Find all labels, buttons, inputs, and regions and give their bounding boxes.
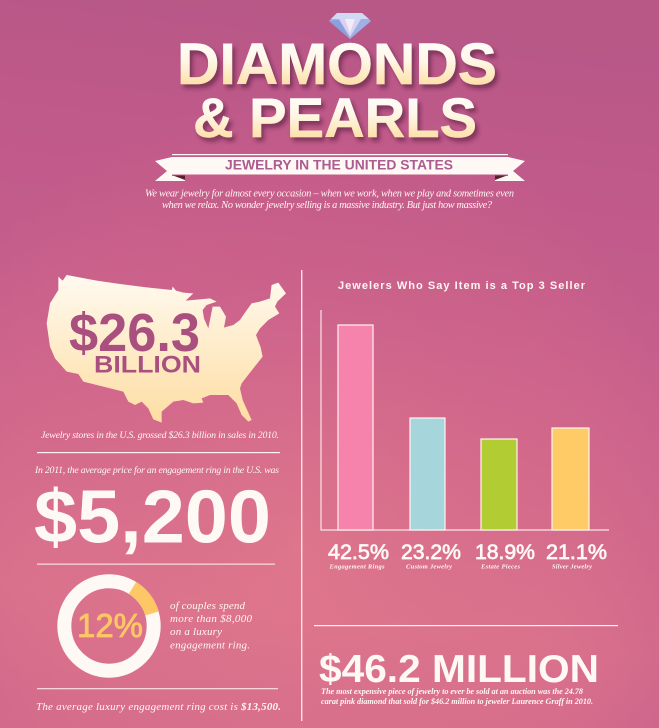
values and labels: Engagement Rings	[328, 564, 385, 570]
bar: Custom Jewelry	[410, 418, 445, 530]
caption: most expensive: The most expensive piece of jewelry to ever be sold at an auction was the 24.78	[321, 687, 583, 696]
text: couples spend: of couples spend	[170, 600, 246, 612]
title: DIAMONDS	[177, 32, 497, 97]
caption: most expensive	[321, 687, 593, 706]
text: couples spend	[170, 600, 252, 652]
banner text: JEWELRY IN THE UNITED STATES	[225, 156, 453, 172]
values and labels: Estate Pieces	[480, 564, 520, 570]
title: & PEARLS	[193, 86, 477, 149]
bar: Estate Pieces	[481, 439, 517, 530]
values and labels: Custom Jewelry	[406, 564, 452, 570]
figure: $26.3	[69, 303, 200, 363]
intro text	[145, 188, 514, 211]
bar chart: top 3 sellers	[321, 280, 609, 530]
text: couples spend: more than $8,000	[170, 613, 252, 625]
text: couples spend: engagement ring.	[170, 640, 250, 652]
values and labels: 21.1%	[546, 541, 607, 564]
chart title: Jewelers Who Say Item is a Top 3 Seller	[338, 280, 586, 292]
figure: $5,200: $5,200	[34, 474, 271, 558]
intro text: when we relax. No wonder jewelry selling is a massive industry. But just how massive?	[162, 200, 493, 211]
bar: Engagement Rings	[338, 325, 373, 530]
values and labels: 42.5%	[328, 541, 389, 564]
donut chart: 12%	[64, 581, 154, 671]
caption: map: Jewelry stores in the U.S. grossed $26.3 billion in sales in 2010.	[41, 430, 279, 441]
bar: Silver Jewelry	[552, 428, 589, 530]
icon: diamond	[329, 13, 371, 39]
title	[177, 32, 497, 149]
figure: $46.2 million: $46.2 MILLION	[319, 648, 599, 691]
banner: subtitle ribbon	[155, 154, 525, 181]
axes	[321, 310, 609, 530]
values and labels	[328, 541, 607, 570]
caption: most expensive: carat pink diamond that sold for $46.2 million to jeweler Laurence Graff in 2010.	[321, 697, 593, 706]
vertical divider	[301, 270, 302, 721]
figure unit: BILLION	[94, 352, 201, 378]
text: average luxury ring cost: The average luxury engagement ring cost is $13,500.	[36, 701, 281, 713]
values and labels: 23.2%	[401, 541, 461, 564]
map: United States sales	[47, 275, 286, 423]
intro text: We wear jewelry for almost every occasion – when we work, when we play and sometimes even	[145, 188, 514, 200]
map shape	[47, 275, 286, 423]
values and labels: 18.9%	[475, 541, 535, 564]
text: engagement ring intro: In 2011, the average price for an engagement ring in the U.S. was	[34, 465, 279, 476]
values and labels: Silver Jewelry	[552, 564, 592, 570]
donut label: 12%	[77, 607, 143, 644]
text: couples spend: on a luxury	[170, 626, 222, 638]
